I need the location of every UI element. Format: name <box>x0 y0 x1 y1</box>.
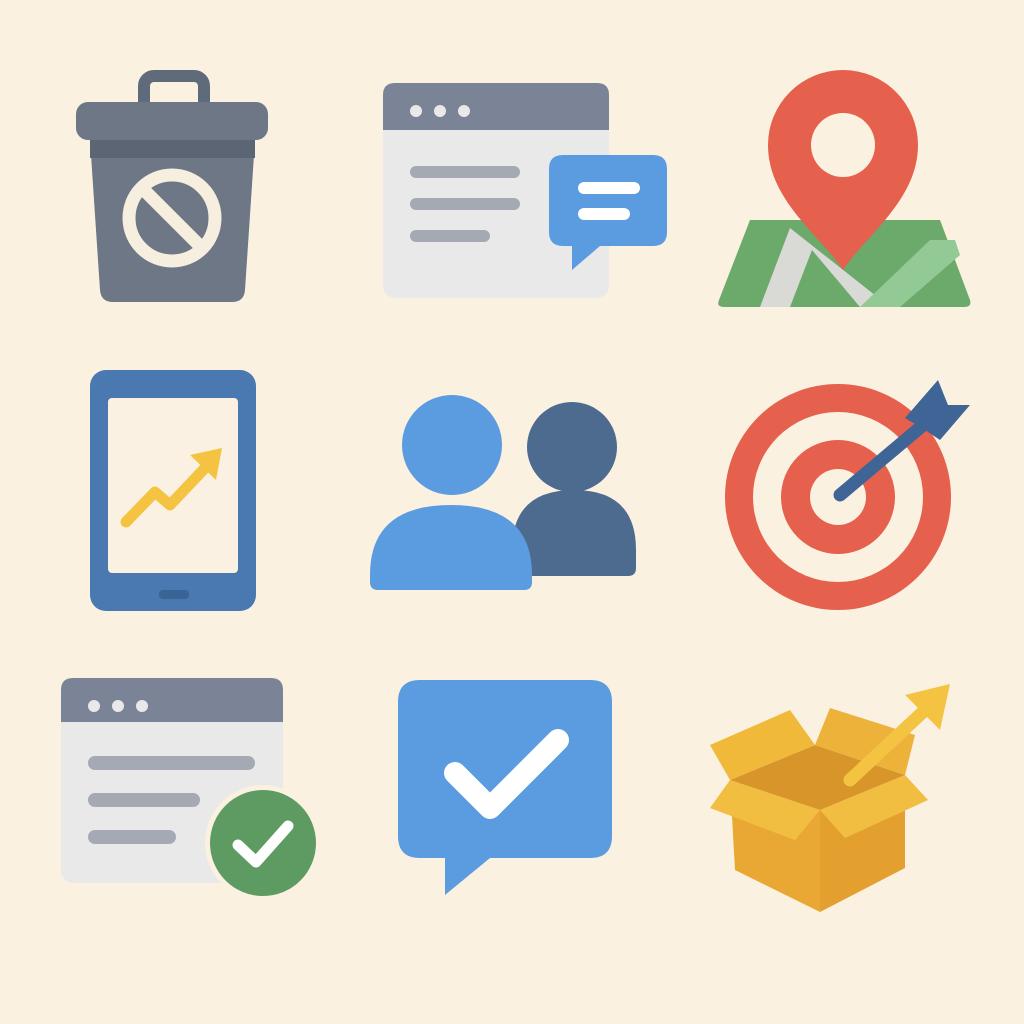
icon: chat bubble with check <box>398 680 612 895</box>
icon: tablet with growth arrow <box>90 370 256 611</box>
icon: trash can <box>76 76 268 302</box>
icon: map pin <box>718 70 970 307</box>
icon: browser with check <box>61 678 321 901</box>
icon: target with arrow <box>725 380 970 610</box>
icon: box with arrow <box>710 684 950 912</box>
icon: two people <box>370 395 636 590</box>
icon: browser with chat bubble <box>383 83 667 298</box>
